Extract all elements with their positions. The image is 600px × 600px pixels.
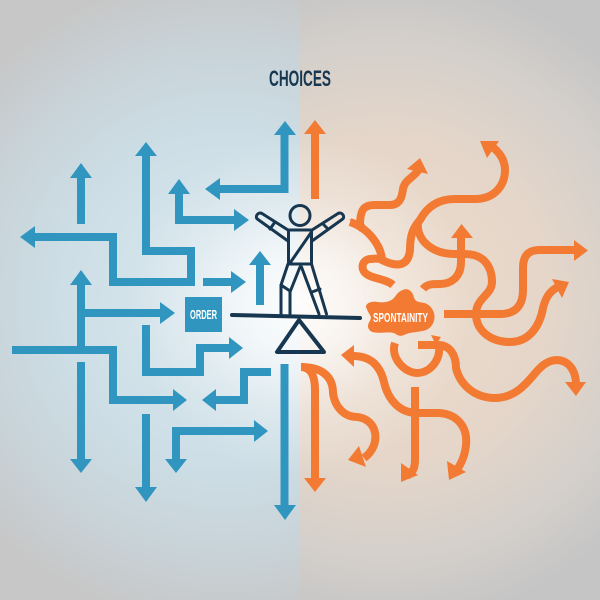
- title: CHOICES: [269, 66, 331, 91]
- arrow: down and right: [165, 420, 268, 473]
- arrow: loop back to upper left: [349, 219, 393, 285]
- arrow: down middle: [135, 414, 157, 502]
- arrow: winding left and up: [20, 142, 191, 282]
- order label: ORDER: [190, 308, 217, 322]
- spontaneity label: [366, 289, 435, 336]
- seesaw triangle: [277, 320, 324, 352]
- arrow: stepped left: [202, 372, 271, 411]
- arrow: long curve to top right: [382, 141, 505, 264]
- arrow: curl to lower left: [301, 367, 375, 467]
- right arm: [312, 213, 344, 241]
- panel: order arrows: [12, 121, 296, 520]
- arrow: far left horizontal to right: [12, 350, 187, 411]
- seesaw beam: [232, 315, 360, 318]
- arrow: long down centre: [274, 364, 296, 520]
- head: [290, 206, 310, 226]
- order label: [185, 297, 222, 332]
- arrow: short up: [249, 251, 271, 305]
- arrow: down from centre: [401, 387, 418, 482]
- arrow: branch up and right: [70, 270, 175, 346]
- panel: spontaneity arrows: [301, 120, 588, 492]
- spontaneity label: SPONTAINITY: [373, 310, 428, 325]
- arrow: up and right: [168, 179, 249, 231]
- arrow: short right: [203, 271, 246, 293]
- arrow: long wave to far right: [418, 345, 586, 398]
- arrow: winding to lower right up: [418, 222, 569, 342]
- left leg: [281, 264, 300, 314]
- arrow: straight up: [304, 120, 326, 199]
- arrow: right from spontaneity: [444, 240, 588, 314]
- arrow: wavy upper right: [360, 158, 428, 226]
- arrow: long down right of centre: [301, 367, 326, 492]
- arrow: long down left: [70, 362, 92, 473]
- arrow: top corner: [205, 121, 296, 200]
- torso: [288, 230, 312, 264]
- balancing figure on seesaw: [232, 206, 360, 352]
- right leg: [302, 264, 326, 314]
- left arm: [256, 213, 288, 241]
- arrow: U turn: [394, 335, 441, 373]
- arrow: stepped right: [146, 325, 243, 372]
- arrow: up far left: [70, 163, 92, 224]
- arrow: up from spontaneity: [423, 224, 473, 289]
- arrow: left pointing winding to bottom: [341, 345, 466, 480]
